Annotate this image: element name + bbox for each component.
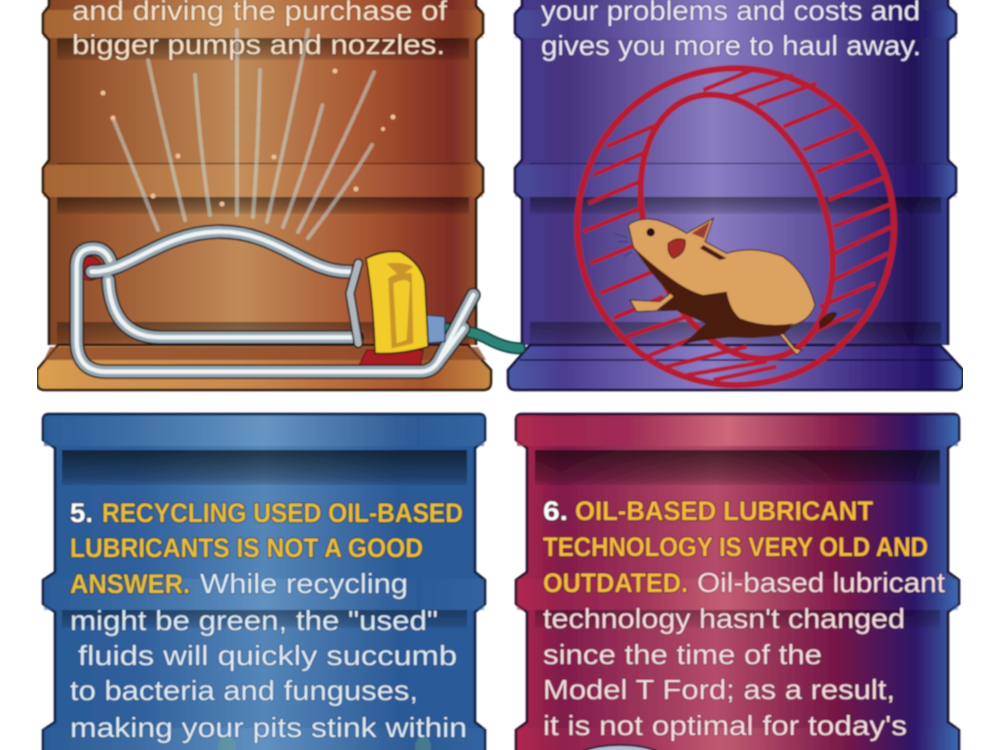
point 6 heading and text: OUTDATED.: [543, 568, 688, 598]
point 5 heading and text: While recycling: [200, 568, 408, 599]
sprinkler tubing: [77, 232, 473, 372]
point 5 heading and text: LUBRICANTS IS NOT A GOOD: [70, 533, 423, 563]
point 6 heading and text: Model T Ford; as a result,: [543, 674, 895, 705]
panel: blue barrel, recycling: [43, 414, 485, 750]
point 5 heading and text: 5.: [70, 498, 93, 528]
panel: crimson barrel, old technology: [516, 414, 959, 750]
water spray: [113, 30, 375, 238]
point 5 heading and text: to bacteria and funguses,: [70, 675, 418, 706]
hamster wheel: [577, 68, 894, 386]
point 6 heading and text: it is not optimal for today's: [543, 710, 907, 741]
grey oval at bottom: [572, 745, 668, 750]
point 6 heading and text: technology hasn't changed: [543, 603, 905, 634]
point 5 heading and text: making your pits stink within: [70, 712, 467, 743]
red base and pivot: [78, 256, 423, 367]
purple barrel body: [508, 0, 963, 390]
hamster: [613, 218, 837, 355]
purple barrel text: gives you more to haul away.: [541, 30, 921, 61]
orange barrel text: bigger pumps and nozzles.: [72, 29, 445, 60]
point 5 heading and text: ANSWER.: [70, 569, 190, 599]
point 6 heading and text: Oil-based lubricant: [697, 567, 945, 598]
point 5 heading and text: fluids will quickly succumb: [78, 640, 457, 671]
orange barrel body: [37, 0, 491, 390]
point 6 heading and text: TECHNOLOGY IS VERY OLD AND: [543, 532, 928, 562]
metal bracket: [350, 263, 358, 343]
green glow at bottom: [218, 736, 431, 750]
yellow sprinkler head: [366, 251, 428, 354]
spray droplets: [100, 68, 396, 206]
crimson barrel body: [516, 414, 959, 750]
point 6 heading and text: 6.: [543, 496, 568, 526]
blue barrel body: [43, 414, 485, 750]
panel: orange barrel, wasted pressure: [37, 0, 491, 390]
point 6 heading and text: OIL-BASED LUBRICANT: [575, 496, 873, 526]
purple barrel text: [541, 0, 921, 61]
orange barrel text: [72, 0, 447, 60]
panel: purple barrel, hamster wheel: [508, 0, 963, 390]
point 5 heading and text: [70, 498, 467, 743]
panel: sprinkler illustration: [77, 232, 520, 372]
point 6 heading and text: [543, 496, 945, 741]
point 6 heading and text: since the time of the: [543, 639, 822, 670]
blue connector: [427, 315, 445, 343]
point 5 heading and text: might be green, the "used": [70, 605, 438, 636]
hose: [443, 328, 520, 348]
point 5 heading and text: RECYCLING USED OIL-BASED: [102, 498, 463, 528]
